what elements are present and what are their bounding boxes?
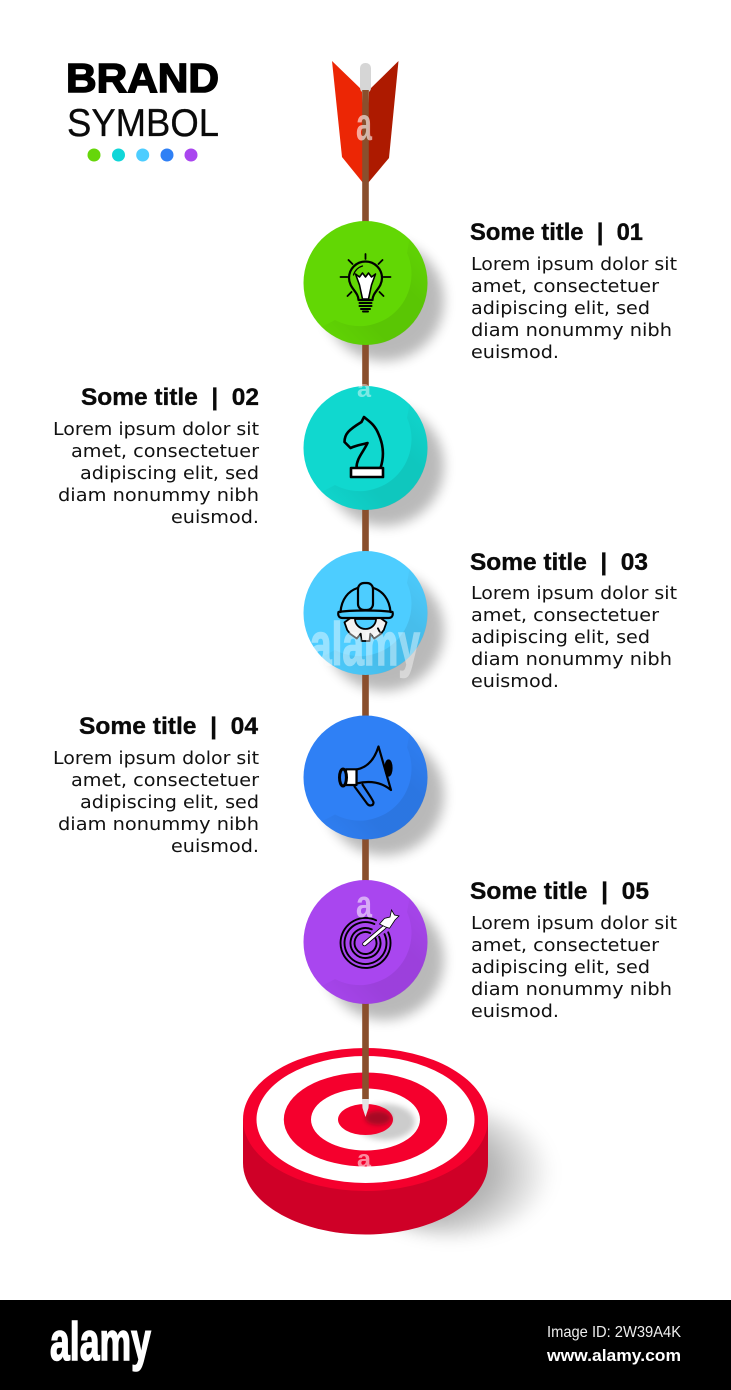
body: step 5: euismod. xyxy=(471,1002,559,1022)
footer bar xyxy=(0,1300,731,1390)
text block: step 1 xyxy=(470,219,677,363)
step 5 circle xyxy=(304,880,428,1004)
body: step 5: Lorem ipsum dolor sit xyxy=(471,914,677,934)
logo word: BRAND: BRAND xyxy=(66,55,219,101)
body: step 4: amet, consectetuer xyxy=(71,771,260,791)
watermarks: alamy xyxy=(310,611,420,678)
footer logo: alamy xyxy=(50,1312,151,1372)
logo: brand symbol xyxy=(66,55,219,162)
body: step 3: diam nonummy nibh xyxy=(471,650,672,670)
body: step 3: euismod. xyxy=(471,672,559,692)
step 4 circle xyxy=(304,716,428,840)
heading: step 4: Some title | 04 xyxy=(79,713,259,740)
target board xyxy=(243,1048,488,1234)
watermarks xyxy=(310,98,420,1173)
body: step 1: amet, consectetuer xyxy=(471,277,660,297)
icon: target with arrow xyxy=(341,910,399,968)
target shadow xyxy=(357,1108,553,1236)
text block: step 4 xyxy=(53,713,260,857)
step 1 circle xyxy=(304,221,428,345)
icon: chess knight xyxy=(344,417,383,477)
arrow fletching right xyxy=(366,61,398,186)
body: step 1: diam nonummy nibh xyxy=(471,321,672,341)
watermarks: a xyxy=(357,376,372,403)
body: step 4: euismod. xyxy=(171,837,259,857)
body: step 5: amet, consectetuer xyxy=(471,936,660,956)
body: step 4 xyxy=(53,749,260,857)
logo colour dots xyxy=(88,148,198,162)
body: step 5 xyxy=(471,914,677,1022)
arrow fletching left xyxy=(332,61,366,186)
body: step 2: diam nonummy nibh xyxy=(58,486,259,506)
heading: step 2: Some title | 02 xyxy=(81,384,259,411)
logo word: SYMBOL: SYMBOL xyxy=(67,102,219,145)
icon: light bulb xyxy=(340,254,390,312)
body: step 2: amet, consectetuer xyxy=(71,442,260,462)
body: step 2: euismod. xyxy=(171,508,259,528)
body: step 4: diam nonummy nibh xyxy=(58,815,259,835)
step 3 circle xyxy=(304,551,428,675)
body: step 3 xyxy=(471,584,677,692)
text block: step 3 xyxy=(470,549,677,692)
body: step 1: adipiscing elit, sed xyxy=(471,299,650,319)
body: step 3: Lorem ipsum dolor sit xyxy=(471,584,677,604)
body: step 1 xyxy=(471,255,677,363)
watermarks: a xyxy=(356,884,373,926)
body: step 2: adipiscing elit, sed xyxy=(80,464,259,484)
text block: step 5 xyxy=(470,878,677,1022)
text block: step 2 xyxy=(53,384,260,528)
watermarks: a xyxy=(356,98,372,150)
body: step 2: Lorem ipsum dolor sit xyxy=(53,420,259,440)
body: step 4: Lorem ipsum dolor sit xyxy=(53,749,259,769)
heading: step 3: Some title | 03 xyxy=(470,549,648,576)
icon: helmet with gear xyxy=(338,583,393,641)
heading: step 1: Some title | 01 xyxy=(470,219,643,246)
arrow shaft xyxy=(362,90,369,1100)
website: www.alamy.com xyxy=(546,1346,681,1365)
body: step 5: adipiscing elit, sed xyxy=(471,958,650,978)
step 2 circle xyxy=(304,386,428,510)
icon: megaphone xyxy=(340,746,392,805)
body: step 5: diam nonummy nibh xyxy=(471,980,672,1000)
body: step 4: adipiscing elit, sed xyxy=(80,793,259,813)
image id: Image ID: 2W39A4K xyxy=(547,1324,681,1341)
arrow xyxy=(332,61,398,1117)
body: step 1: euismod. xyxy=(471,343,559,363)
watermarks: a xyxy=(357,1146,372,1173)
body: step 2 xyxy=(53,420,260,528)
body: step 1: Lorem ipsum dolor sit xyxy=(471,255,677,275)
circle long shadows xyxy=(324,241,444,1020)
arrow nock xyxy=(360,63,371,93)
body: step 3: amet, consectetuer xyxy=(471,606,660,626)
body: step 3: adipiscing elit, sed xyxy=(471,628,650,648)
heading: step 5: Some title | 05 xyxy=(470,878,649,905)
arrow tip xyxy=(362,1099,369,1117)
